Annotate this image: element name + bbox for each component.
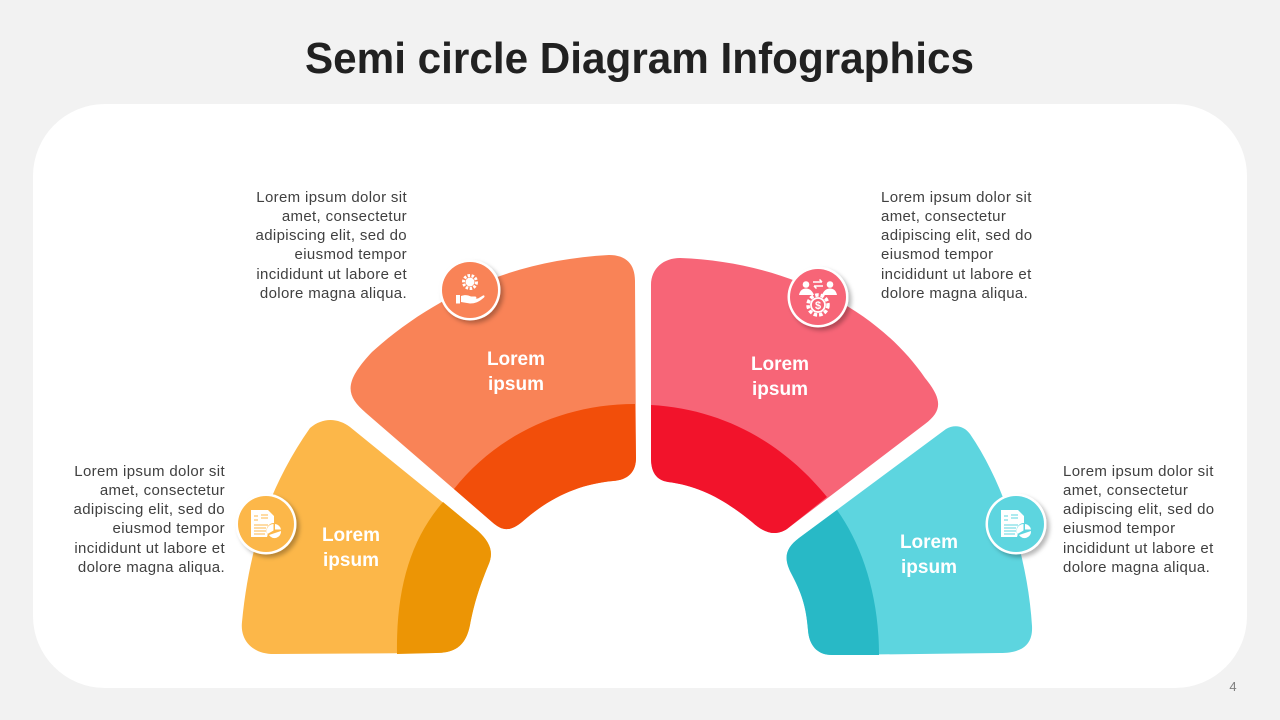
text block: bottom left: Lorem ipsum dolor sit	[74, 463, 225, 480]
text block: bottom left: dolore magna aliqua.	[78, 559, 225, 576]
yellow label: ipsum	[323, 550, 379, 571]
text block: top left: adipiscing elit, sed do	[256, 227, 407, 244]
text block: top left: eiusmod tempor	[295, 246, 407, 263]
text block: top right: amet, consectetur	[881, 208, 1006, 225]
segment: teal	[787, 426, 1032, 655]
segment: red	[651, 258, 938, 533]
text block: top right: Lorem ipsum dolor sit	[881, 189, 1032, 206]
icon: people exchange and dollar gear	[788, 266, 848, 328]
page number: 4	[1229, 679, 1237, 694]
teal label: Lorem	[900, 532, 958, 553]
text block: top right: eiusmod tempor	[881, 246, 993, 263]
segment: yellow	[242, 420, 491, 654]
icon: report with pie chart, teal	[986, 494, 1046, 554]
red label: Lorem	[751, 354, 809, 375]
teal dark band	[787, 510, 879, 655]
icon: people exchange and dollar gear: $	[815, 300, 821, 312]
text block: bottom right: eiusmod tempor	[1063, 520, 1175, 537]
text block: top left: Lorem ipsum dolor sit	[256, 189, 407, 206]
segment: orange	[351, 255, 636, 529]
text block: bottom left: eiusmod tempor	[113, 520, 225, 537]
red label: ipsum	[752, 379, 808, 400]
yellow dark band	[397, 502, 491, 654]
text block: top right: incididunt ut labore et	[881, 266, 1032, 283]
text block: bottom right: Lorem ipsum dolor sit	[1063, 463, 1214, 480]
red dark band	[651, 405, 827, 533]
text block: bottom right: amet, consectetur	[1063, 482, 1188, 499]
text block: bottom right: adipiscing elit, sed do	[1063, 501, 1214, 518]
orange label: ipsum	[488, 374, 544, 395]
text block: top left: incididunt ut labore et	[256, 266, 407, 283]
orange label: Lorem	[487, 349, 545, 370]
text block: bottom left: incididunt ut labore et	[74, 540, 225, 557]
text block: top left: dolore magna aliqua.	[260, 285, 407, 302]
icon: report with pie chart, yellow	[236, 494, 296, 554]
title: Semi circle Diagram Infographics	[305, 34, 974, 83]
icon: hand holding gear	[440, 260, 500, 320]
text block: top left: amet, consectetur	[282, 208, 407, 225]
orange dark band	[454, 404, 636, 529]
text block: top right: adipiscing elit, sed do	[881, 227, 1032, 244]
text block: bottom right: dolore magna aliqua.	[1063, 559, 1210, 576]
text block: bottom left: amet, consectetur	[100, 482, 225, 499]
text block: bottom right: incididunt ut labore et	[1063, 540, 1214, 557]
text block: top right: dolore magna aliqua.	[881, 285, 1028, 302]
yellow label: Lorem	[322, 525, 380, 546]
teal label: ipsum	[901, 557, 957, 578]
white card panel	[33, 104, 1247, 688]
text block: bottom left: adipiscing elit, sed do	[74, 501, 225, 518]
